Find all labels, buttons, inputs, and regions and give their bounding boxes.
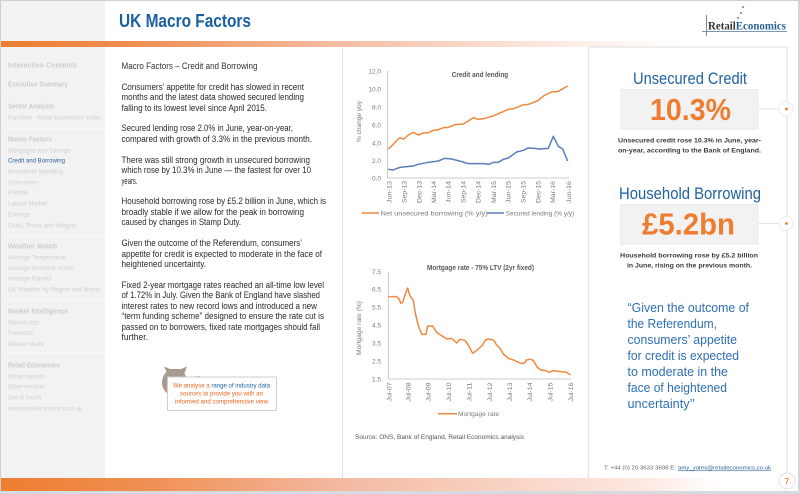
text block: credit and borrowing commentary: compared with growth of 3.3% in the previous month.	[122, 134, 312, 144]
y axis title: % change yoy	[356, 100, 363, 142]
x axis labels: Mar-14	[431, 181, 438, 203]
x axis labels: Mar-16	[550, 181, 557, 203]
quote: uncertainty’’	[628, 396, 695, 411]
panel: navigation sidebar: Consumers	[8, 180, 39, 186]
stat: household borrowing: Household Borrowing	[619, 184, 761, 203]
x axis labels	[386, 181, 573, 203]
legend	[362, 210, 574, 218]
x axis labels: Jun-16	[566, 181, 573, 203]
text block: credit and borrowing commentary: months and the latest data showed secured lending	[122, 92, 304, 102]
panel: charts column divider	[342, 47, 343, 478]
stat: household borrowing	[619, 184, 761, 270]
stat: household borrowing: Household borrowing rose by £5.2 billion	[620, 252, 758, 260]
x axis labels: Jul-10	[446, 382, 453, 402]
x axis labels: Jul-12	[487, 382, 494, 402]
text block: credit and borrowing commentary: interest rates to new record lows and introduced a new	[122, 301, 317, 311]
y axis labels: 3.5	[372, 340, 381, 348]
stat: household borrowing: £5.2bn	[642, 206, 735, 242]
text block: credit and borrowing commentary: caused by changes in Stamp Duty.	[122, 217, 241, 227]
text block: credit and borrowing commentary: broadly stable if we allow for the peak in borrowing	[122, 207, 304, 217]
quote: consumers’ appetite	[628, 332, 737, 347]
y axis labels: 8.0	[372, 104, 381, 112]
top orange gradient bar	[1, 41, 681, 47]
axes	[388, 272, 571, 379]
callout: data sources note: sources to provide you with an	[180, 390, 263, 398]
panel: navigation sidebar: Weather Watch	[8, 242, 57, 250]
legend	[438, 411, 499, 418]
text block: credit and borrowing commentary: which rose by 10.3% in June — the fastest for over 10	[121, 165, 311, 175]
icon: owl mascot	[162, 366, 200, 396]
x axis labels: Jul-07	[386, 382, 394, 402]
connector marker: unsecured credit	[758, 102, 793, 116]
y axis labels: 5.5	[372, 304, 381, 312]
page number badge: 7	[785, 477, 790, 486]
panel: navigation sidebar: Other services	[8, 384, 47, 390]
text block: credit and borrowing commentary: Secured lending rose 2.0% in June, year-on-year,	[122, 123, 293, 133]
quote: “Given the outcome of	[628, 300, 749, 315]
axes	[388, 71, 569, 178]
panel: navigation sidebar: Labour Market	[8, 200, 47, 208]
x axis labels	[386, 382, 575, 402]
panel: navigation sidebar: UK Weather by Region and Metric	[8, 286, 101, 294]
series: net unsecured borrowing	[388, 86, 568, 149]
text block: credit and borrowing commentary: Given the outcome of the Referendum, consumers’	[122, 238, 302, 248]
bottom orange gradient bar	[1, 478, 719, 491]
legend: Mortgage rate	[458, 411, 499, 418]
panel: navigation sidebar: Furniture - Retail Economics Index	[8, 114, 101, 122]
x axis labels: Jul-11	[466, 382, 474, 402]
contact details: amy_yates@retaileconomics.co.uk	[678, 466, 771, 472]
panel: navigation sidebar: Earnings	[8, 212, 31, 218]
callout: data sources note: We analyse a range of industry data	[173, 382, 270, 390]
title: UK Macro Factors	[119, 11, 251, 31]
x axis labels: Jun-13	[386, 181, 394, 203]
y axis title: Mortgage rate (%)	[356, 301, 363, 355]
x axis labels: Dec-14	[476, 181, 482, 203]
panel: navigation sidebar: Sector Analysis	[8, 102, 54, 110]
source note: Source: ONS, Bank of England, Retail Economics analysis	[355, 434, 525, 441]
y axis labels: 12.0	[368, 68, 381, 76]
panel: navigation sidebar: Retail Economics	[8, 360, 60, 370]
x axis labels: Jul-09	[426, 382, 432, 402]
text block: credit and borrowing commentary: “term funding scheme” designed to ensure the rate cut is	[122, 311, 324, 321]
text block: credit and borrowing commentary: appetite for credit is expected to moderate in the face of	[122, 249, 322, 259]
panel: navigation sidebar: Credit and Borrowing	[8, 158, 65, 164]
x axis labels: Jul-15	[548, 382, 554, 402]
panel: navigation sidebar: Average Temperature	[8, 254, 66, 262]
y axis labels: 10.0	[368, 86, 381, 94]
stat: unsecured credit	[618, 69, 761, 154]
line chart: credit and lending	[356, 68, 574, 218]
y axis labels: 1.5	[372, 376, 381, 384]
contact details	[604, 466, 771, 472]
stat: household borrowing: in June, rising on the previous month.	[627, 262, 752, 270]
x axis labels: Jul-08	[406, 382, 412, 402]
page number badge	[779, 473, 795, 489]
line chart: mortgage rate	[356, 265, 575, 418]
connector marker: household borrowing	[758, 216, 793, 230]
text block: credit and borrowing commentary: falling to its lowest level since April 2015.	[122, 103, 267, 113]
panel: navigation sidebar: Average Sunshine Hours	[8, 265, 74, 272]
text block: credit and borrowing commentary	[121, 61, 326, 342]
quote: for credit is expected	[628, 348, 739, 363]
text block: credit and borrowing commentary: Household borrowing rose by £5.2 billion in June, which is	[122, 196, 326, 206]
y axis labels: 2.5	[372, 358, 381, 366]
text block: credit and borrowing commentary: Macro Factors – Credit and Borrowing	[122, 61, 258, 71]
panel: navigation sidebar: Get in touch	[8, 394, 41, 402]
logo: Retail Economics	[702, 6, 787, 36]
x axis labels: Jul-13	[507, 382, 514, 402]
series: secured lending	[388, 136, 568, 170]
x axis labels: Sep-13	[402, 181, 408, 203]
y axis labels: 7.5	[372, 269, 381, 276]
stat: unsecured credit: 10.3%	[650, 92, 731, 127]
text block: credit and borrowing commentary: heightened uncertainty.	[122, 259, 206, 269]
x axis labels: Jun-14	[446, 181, 452, 203]
contact details: T: +44 (0) 20 3633 3698 E:	[604, 466, 676, 472]
y axis labels: 6.0	[372, 122, 381, 130]
logo: Retail Economics: RetailEconomics	[708, 18, 786, 32]
stat: unsecured credit: on-year, according to the Bank of England.	[618, 148, 761, 154]
panel: navigation sidebar	[1, 1, 105, 478]
x axis labels: Mar-15	[491, 181, 498, 203]
quote: the Referendum,	[628, 316, 717, 331]
y axis labels: 4.5	[372, 322, 381, 330]
legend: Net unsecured borrowing (% y/y)	[381, 210, 488, 218]
legend: Secured lending (% y/y)	[506, 210, 574, 218]
panel: navigation sidebar: www.retaileconomics.co.uk	[7, 406, 83, 412]
x axis labels: Jul-16	[568, 382, 575, 402]
quote: face of heightened	[628, 380, 727, 395]
y axis labels: 2.0	[372, 158, 381, 165]
series: mortgage rate	[388, 288, 571, 375]
panel: navigation sidebar: Forecasts	[8, 330, 34, 337]
text block: credit and borrowing commentary: Fixed 2-year mortgage rates reached an all-time low level	[122, 280, 324, 290]
panel: navigation sidebar: Costs, Prices and Margins	[8, 222, 77, 230]
y axis labels: 0.0	[372, 176, 381, 182]
panel: navigation sidebar: Market share	[8, 341, 44, 348]
text block: credit and borrowing commentary: There was still strong growth in unsecured borrowing	[122, 155, 310, 165]
callout: data sources note: informed and comprehensive view	[175, 398, 268, 406]
x axis labels: Jun-15	[506, 181, 512, 203]
quote: to moderate in the	[628, 364, 728, 379]
stat: unsecured credit: Unsecured credit rose 10.3% in June, year-	[618, 138, 761, 144]
stat: unsecured credit: Unsecured Credit	[633, 69, 747, 88]
panel: navigation sidebar: Mortgages and Savings	[8, 148, 71, 154]
y axis labels: 6.5	[372, 286, 381, 294]
text block: credit and borrowing commentary: of 1.72% in July. Given the Bank of England have slashed	[122, 290, 320, 300]
x axis labels: Jul-14	[527, 382, 534, 402]
text block: credit and borrowing commentary: years.	[122, 176, 138, 186]
panel: navigation sidebar: Market Intelligence	[8, 306, 68, 316]
quote	[628, 300, 749, 411]
panel: navigation sidebar: Average Rainfall	[8, 276, 52, 282]
y axis labels: 4.0	[372, 140, 381, 148]
chart title: mortgage rate: Mortgage rate - 75% LTV (2yr fixed)	[427, 265, 534, 272]
y axis labels	[368, 68, 381, 182]
panel: navigation sidebar: Footfall	[8, 190, 29, 196]
panel: navigation sidebar: Other reports	[8, 374, 45, 380]
x axis labels: Sep-14	[460, 181, 468, 203]
panel: navigation sidebar: Interactive Contents	[8, 60, 77, 70]
text block: credit and borrowing commentary: Consumers’ appetite for credit has slowed in recent	[122, 82, 304, 92]
x axis labels: Sep-15	[520, 181, 528, 203]
x axis labels: Dec-13	[416, 181, 424, 203]
x axis labels: Dec-15	[536, 181, 542, 203]
panel: navigation sidebar: Macro Factors	[8, 134, 52, 144]
y axis labels	[372, 269, 381, 384]
panel: navigation sidebar: Executive Summary	[8, 80, 69, 88]
callout: data sources note	[168, 377, 276, 410]
chart title: credit and lending: Credit and lending	[452, 72, 508, 79]
panel: navigation sidebar: Household Spending	[8, 168, 63, 176]
panel: key stats	[588, 47, 793, 478]
panel: navigation sidebar: Market size	[8, 320, 39, 326]
text block: credit and borrowing commentary: further.	[122, 332, 148, 342]
text block: credit and borrowing commentary: passed on to borrowers, fixed rate mortgages should fall	[122, 322, 320, 332]
